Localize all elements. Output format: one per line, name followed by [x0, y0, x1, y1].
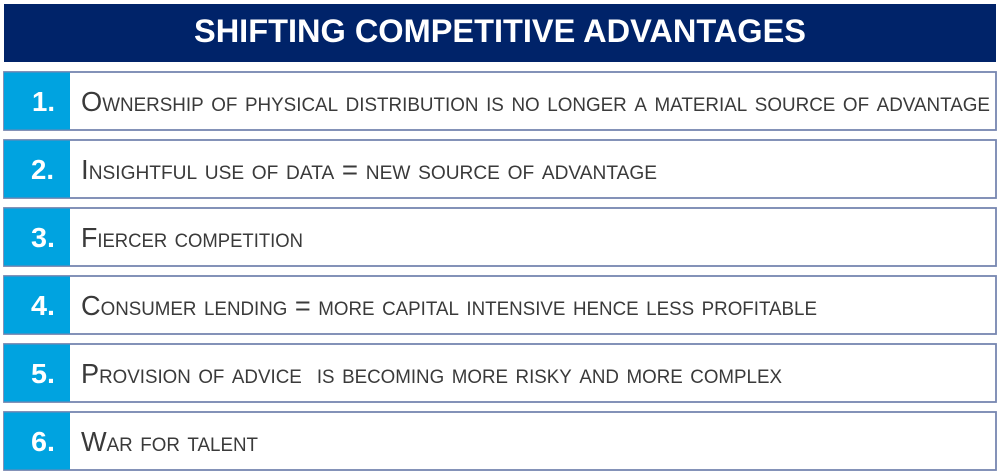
number 3: 3. — [31, 222, 55, 253]
row 3 — [4, 208, 996, 266]
text 4: Consumer lending = more capital intensive hence less profitable — [81, 290, 817, 321]
text 1: Ownership of physical distribution is no longer a material source of advantage — [81, 86, 990, 117]
row 1 — [4, 72, 996, 130]
number 1: 1. — [32, 86, 55, 117]
number 5: 5. — [31, 358, 55, 389]
row 2 — [4, 140, 996, 198]
title: SHIFTING COMPETITIVE ADVANTAGES — [194, 13, 806, 49]
number 6: 6. — [31, 426, 55, 457]
number 4: 4. — [31, 290, 55, 321]
number 2: 2. — [31, 154, 54, 185]
text 5: Provision of advice is becoming more risky and more complex — [81, 358, 782, 389]
text 2: Insightful use of data = new source of advantage — [81, 154, 657, 185]
text 6: War for talent — [81, 426, 258, 457]
row 4 — [4, 276, 996, 334]
text 3: Fiercer competition — [81, 222, 303, 253]
title banner — [4, 4, 996, 62]
row 6 — [4, 412, 996, 470]
row 5 — [4, 344, 996, 402]
